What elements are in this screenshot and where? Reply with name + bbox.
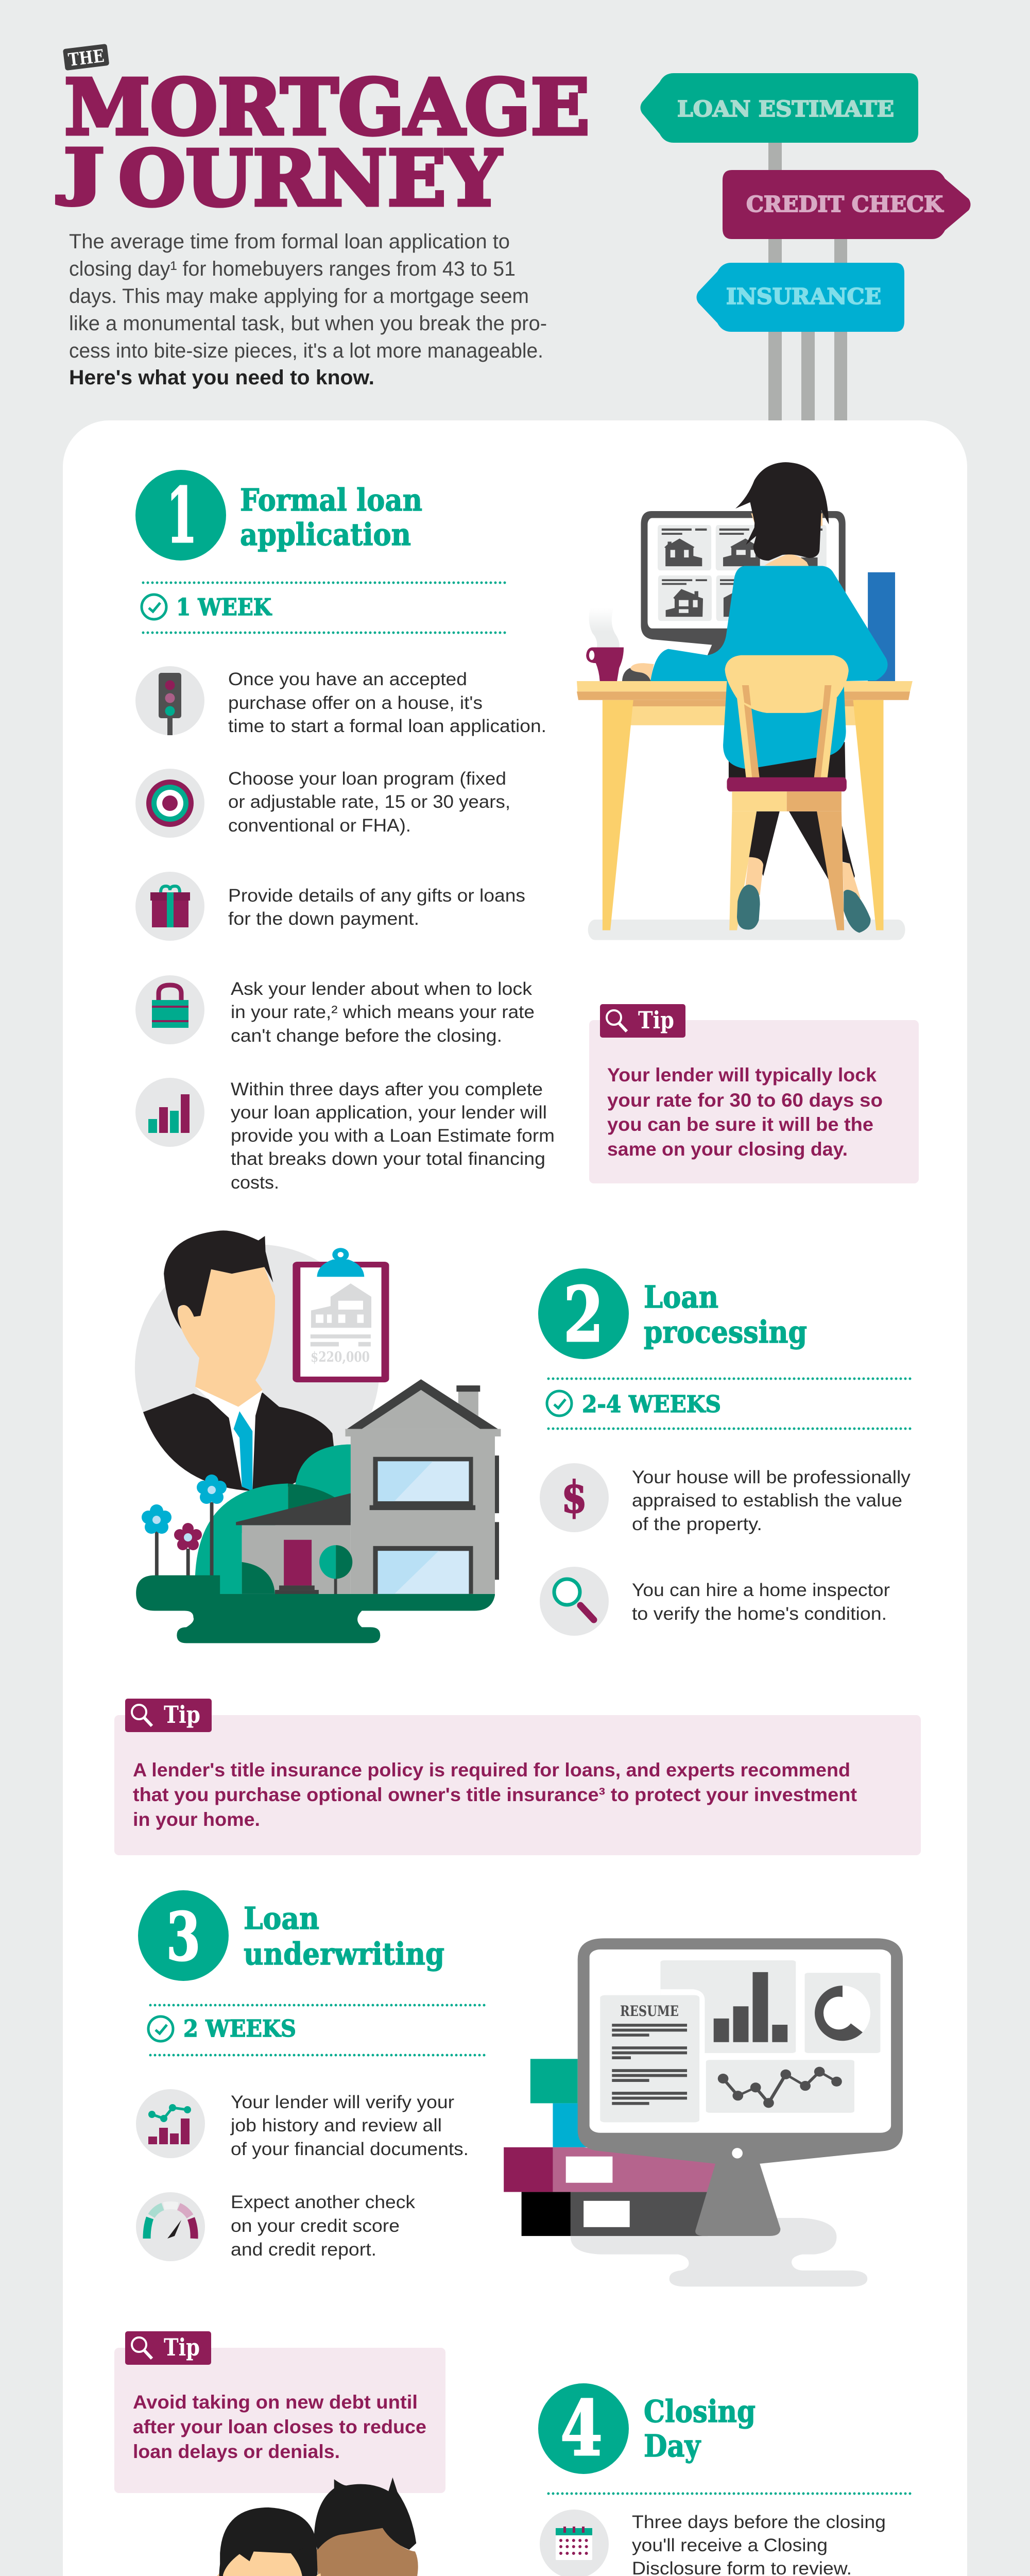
book [868, 572, 895, 681]
illustration: man with clipboard and house [135, 1230, 501, 1643]
section 1 duration: 1 WEEK [176, 594, 272, 621]
sign: loan estimate: LOAN ESTIMATE [677, 96, 894, 122]
text: rate lock: in your rate,² which means your rate [231, 1002, 535, 1022]
text: accepted offer: Once you have an accepted [228, 669, 467, 689]
man [143, 1230, 335, 1491]
tip panel 3 [114, 2331, 445, 2493]
screen charts [660, 1960, 880, 2113]
ground [136, 1575, 495, 1643]
section 4 heading: Day [644, 2428, 701, 2464]
icon: bars [135, 1078, 204, 1147]
tip text: Avoid taking on new debt until [133, 2392, 418, 2413]
icon: magnifier [540, 1567, 609, 1636]
text: loan estimate: that breaks down your total financing [231, 1149, 545, 1169]
text: rate lock [231, 979, 535, 1046]
tip tag: Tip [638, 1006, 674, 1034]
illustration: couple with closing disclosure [162, 2478, 478, 2576]
tip tag [600, 1004, 685, 1038]
section 4 badge: 4 [560, 2384, 603, 2473]
section 1 duration [142, 594, 272, 621]
sign: credit check [723, 170, 970, 239]
tip tag [125, 2331, 211, 2365]
tip text: same on your closing day. [607, 1139, 848, 1160]
text: credit check: and credit report. [231, 2240, 376, 2260]
title line: journey: OURNEY [118, 133, 502, 223]
section 2 badge [538, 1268, 629, 1359]
floor shadow [588, 920, 905, 940]
tip text: after your loan closes to reduce [133, 2416, 426, 2437]
text: loan estimate: costs. [231, 1173, 279, 1193]
section 3 heading [244, 1901, 444, 1972]
sign posts [768, 139, 847, 422]
text: job history: job history and review all [230, 2115, 442, 2136]
shoes [737, 885, 870, 933]
text: gifts: for the down payment. [228, 909, 419, 929]
woman [162, 2507, 360, 2576]
icon: dollar: $ [561, 1471, 587, 1522]
monitor [641, 511, 846, 655]
text: closing disclosure [632, 2512, 886, 2576]
illustration: monitor with books [504, 1938, 903, 2286]
intro text [69, 230, 547, 389]
tip text [133, 1759, 857, 1830]
title [57, 44, 590, 223]
text: loan estimate: Within three days after you complete [231, 1079, 543, 1099]
section 3 badge [138, 1890, 229, 1981]
clipboard [293, 1248, 389, 1382]
section 1 heading: application [240, 517, 411, 552]
sign: insurance: INSURANCE [726, 284, 881, 309]
intro text: days. This may make applying for a mortgage seem [69, 285, 529, 308]
house [236, 1379, 501, 1595]
illustration: woman at desk [577, 462, 913, 940]
section 2 duration: 2-4 WEEKS [582, 1391, 721, 1418]
text: appraisal [632, 1467, 911, 1534]
icon: dollar [540, 1463, 609, 1532]
text: credit check [231, 2192, 416, 2260]
section 3 duration: 2 WEEKS [183, 2015, 296, 2042]
text: loan estimate [231, 1079, 555, 1193]
section 1 badge [135, 470, 226, 561]
icon: gift [135, 872, 204, 941]
cup [586, 648, 624, 681]
text: loan program: Choose your loan program (fixed [228, 769, 506, 789]
books [504, 2059, 716, 2236]
intro text: The average time from formal loan application to [69, 230, 510, 253]
tip text: you can be sure it will be the [607, 1114, 873, 1135]
text: job history: Your lender will verify your [231, 2092, 454, 2112]
white content panel [63, 420, 967, 2576]
sign: credit check: CREDIT CHECK [746, 192, 944, 217]
monitor body [578, 1938, 903, 2236]
intro text: Here's what you need to know. [69, 366, 374, 389]
section 1 badge: 1 [166, 471, 197, 560]
text: loan program: conventional or FHA). [228, 816, 411, 836]
section 4 heading [644, 2394, 756, 2464]
text: inspector: You can hire a home inspector [632, 1580, 890, 1600]
section 1 heading [240, 482, 422, 552]
text: closing disclosure: you'll receive a Closing [632, 2535, 828, 2555]
text: loan program: or adjustable rate, 15 or 30 years, [228, 792, 510, 812]
label: resume: RESUME [620, 2003, 679, 2020]
text: appraisal: appraised to establish the value [632, 1490, 902, 1511]
text: gifts: Provide details of any gifts or loans [228, 886, 525, 906]
text: accepted offer: purchase offer on a house, it's [228, 693, 483, 713]
backdrop circle [135, 1244, 380, 1491]
tip panel 2 [114, 1699, 921, 1855]
tip tag: Tip [164, 2333, 200, 2361]
chair [725, 655, 849, 930]
section 2 badge: 2 [563, 1270, 604, 1359]
tip panel 1 [589, 1004, 919, 1183]
tip text: loan delays or denials. [133, 2441, 340, 2462]
section 1 heading: Formal loan [240, 482, 422, 518]
section 2 heading: processing [644, 1314, 807, 1350]
bushes [195, 1445, 353, 1594]
tip text [133, 2392, 426, 2462]
man [205, 2478, 478, 2576]
text: rate lock: can't change before the closing. [231, 1026, 502, 1046]
title line: journey: J [57, 135, 104, 207]
icon: chart [136, 2089, 205, 2158]
tip text: your rate for 30 to 60 days so [607, 1090, 883, 1111]
label: clipboard price: $220,000 [311, 1349, 370, 1365]
flowers [142, 1475, 227, 1550]
icon: calendar [540, 2510, 609, 2576]
section 3 heading: Loan [244, 1901, 319, 1936]
sign: insurance [696, 263, 904, 332]
text: loan estimate: your loan application, your lender will [231, 1103, 547, 1123]
text: accepted offer: time to start a formal loan application. [228, 716, 546, 736]
icon: lock [135, 975, 204, 1044]
intro text: like a monumental task, but when you break the pro- [69, 312, 547, 335]
front bush [210, 1562, 275, 1594]
intro text: cess into bite-size pieces, it's a lot more manageable. [69, 340, 543, 362]
text: job history [230, 2092, 469, 2159]
sign: loan estimate [641, 73, 918, 143]
shadow [571, 2218, 867, 2286]
tip text: A lender's title insurance policy is required for loans, and experts recommend [133, 1759, 850, 1781]
text: closing disclosure: Three days before the closing [632, 2512, 886, 2532]
text: credit check: Expect another check [231, 2192, 416, 2212]
steam [589, 608, 620, 648]
tip text: in your home. [133, 1809, 260, 1830]
section 4 badge [538, 2383, 629, 2474]
mouse and hand [622, 663, 654, 681]
icon: target [135, 769, 204, 838]
tip tag [125, 1699, 212, 1732]
desk [577, 681, 913, 930]
text: loan estimate: provide you with a Loan Estimate form [231, 1126, 555, 1146]
resume document [600, 1989, 705, 2122]
text: job history: of your financial documents. [231, 2139, 469, 2159]
section 2 heading [644, 1279, 807, 1350]
title tag: the: THE [67, 46, 106, 71]
text: rate lock: Ask your lender about when to lock [231, 979, 533, 999]
icon: traffic light [135, 666, 204, 735]
text: inspector [632, 1580, 890, 1624]
text: inspector: to verify the home's condition. [632, 1604, 887, 1624]
person [650, 462, 888, 898]
text: appraisal: of the property. [632, 1514, 762, 1534]
stems [155, 1502, 214, 1576]
section 3 heading: underwriting [244, 1936, 444, 1972]
section 2 heading: Loan [644, 1279, 718, 1315]
section 3 badge: 3 [166, 1899, 200, 1976]
intro text: closing day¹ for homebuyers ranges from 43 to 51 [69, 258, 516, 280]
text: gifts [228, 886, 525, 929]
tip tag: Tip [164, 1701, 200, 1728]
tip text: Your lender will typically lock [607, 1064, 877, 1086]
icon: gauge [136, 2192, 205, 2261]
tip text: that you purchase optional owner's title insurance³ to protect your investment [133, 1784, 857, 1805]
tip text [607, 1064, 883, 1160]
title line: mortgage: MORTGAGE [64, 62, 590, 152]
text: accepted offer [228, 669, 546, 736]
text: appraisal: Your house will be professionally [632, 1467, 911, 1487]
section 4 heading: Closing [644, 2394, 756, 2429]
text: loan program [228, 769, 510, 836]
text: credit check: on your credit score [231, 2216, 400, 2236]
